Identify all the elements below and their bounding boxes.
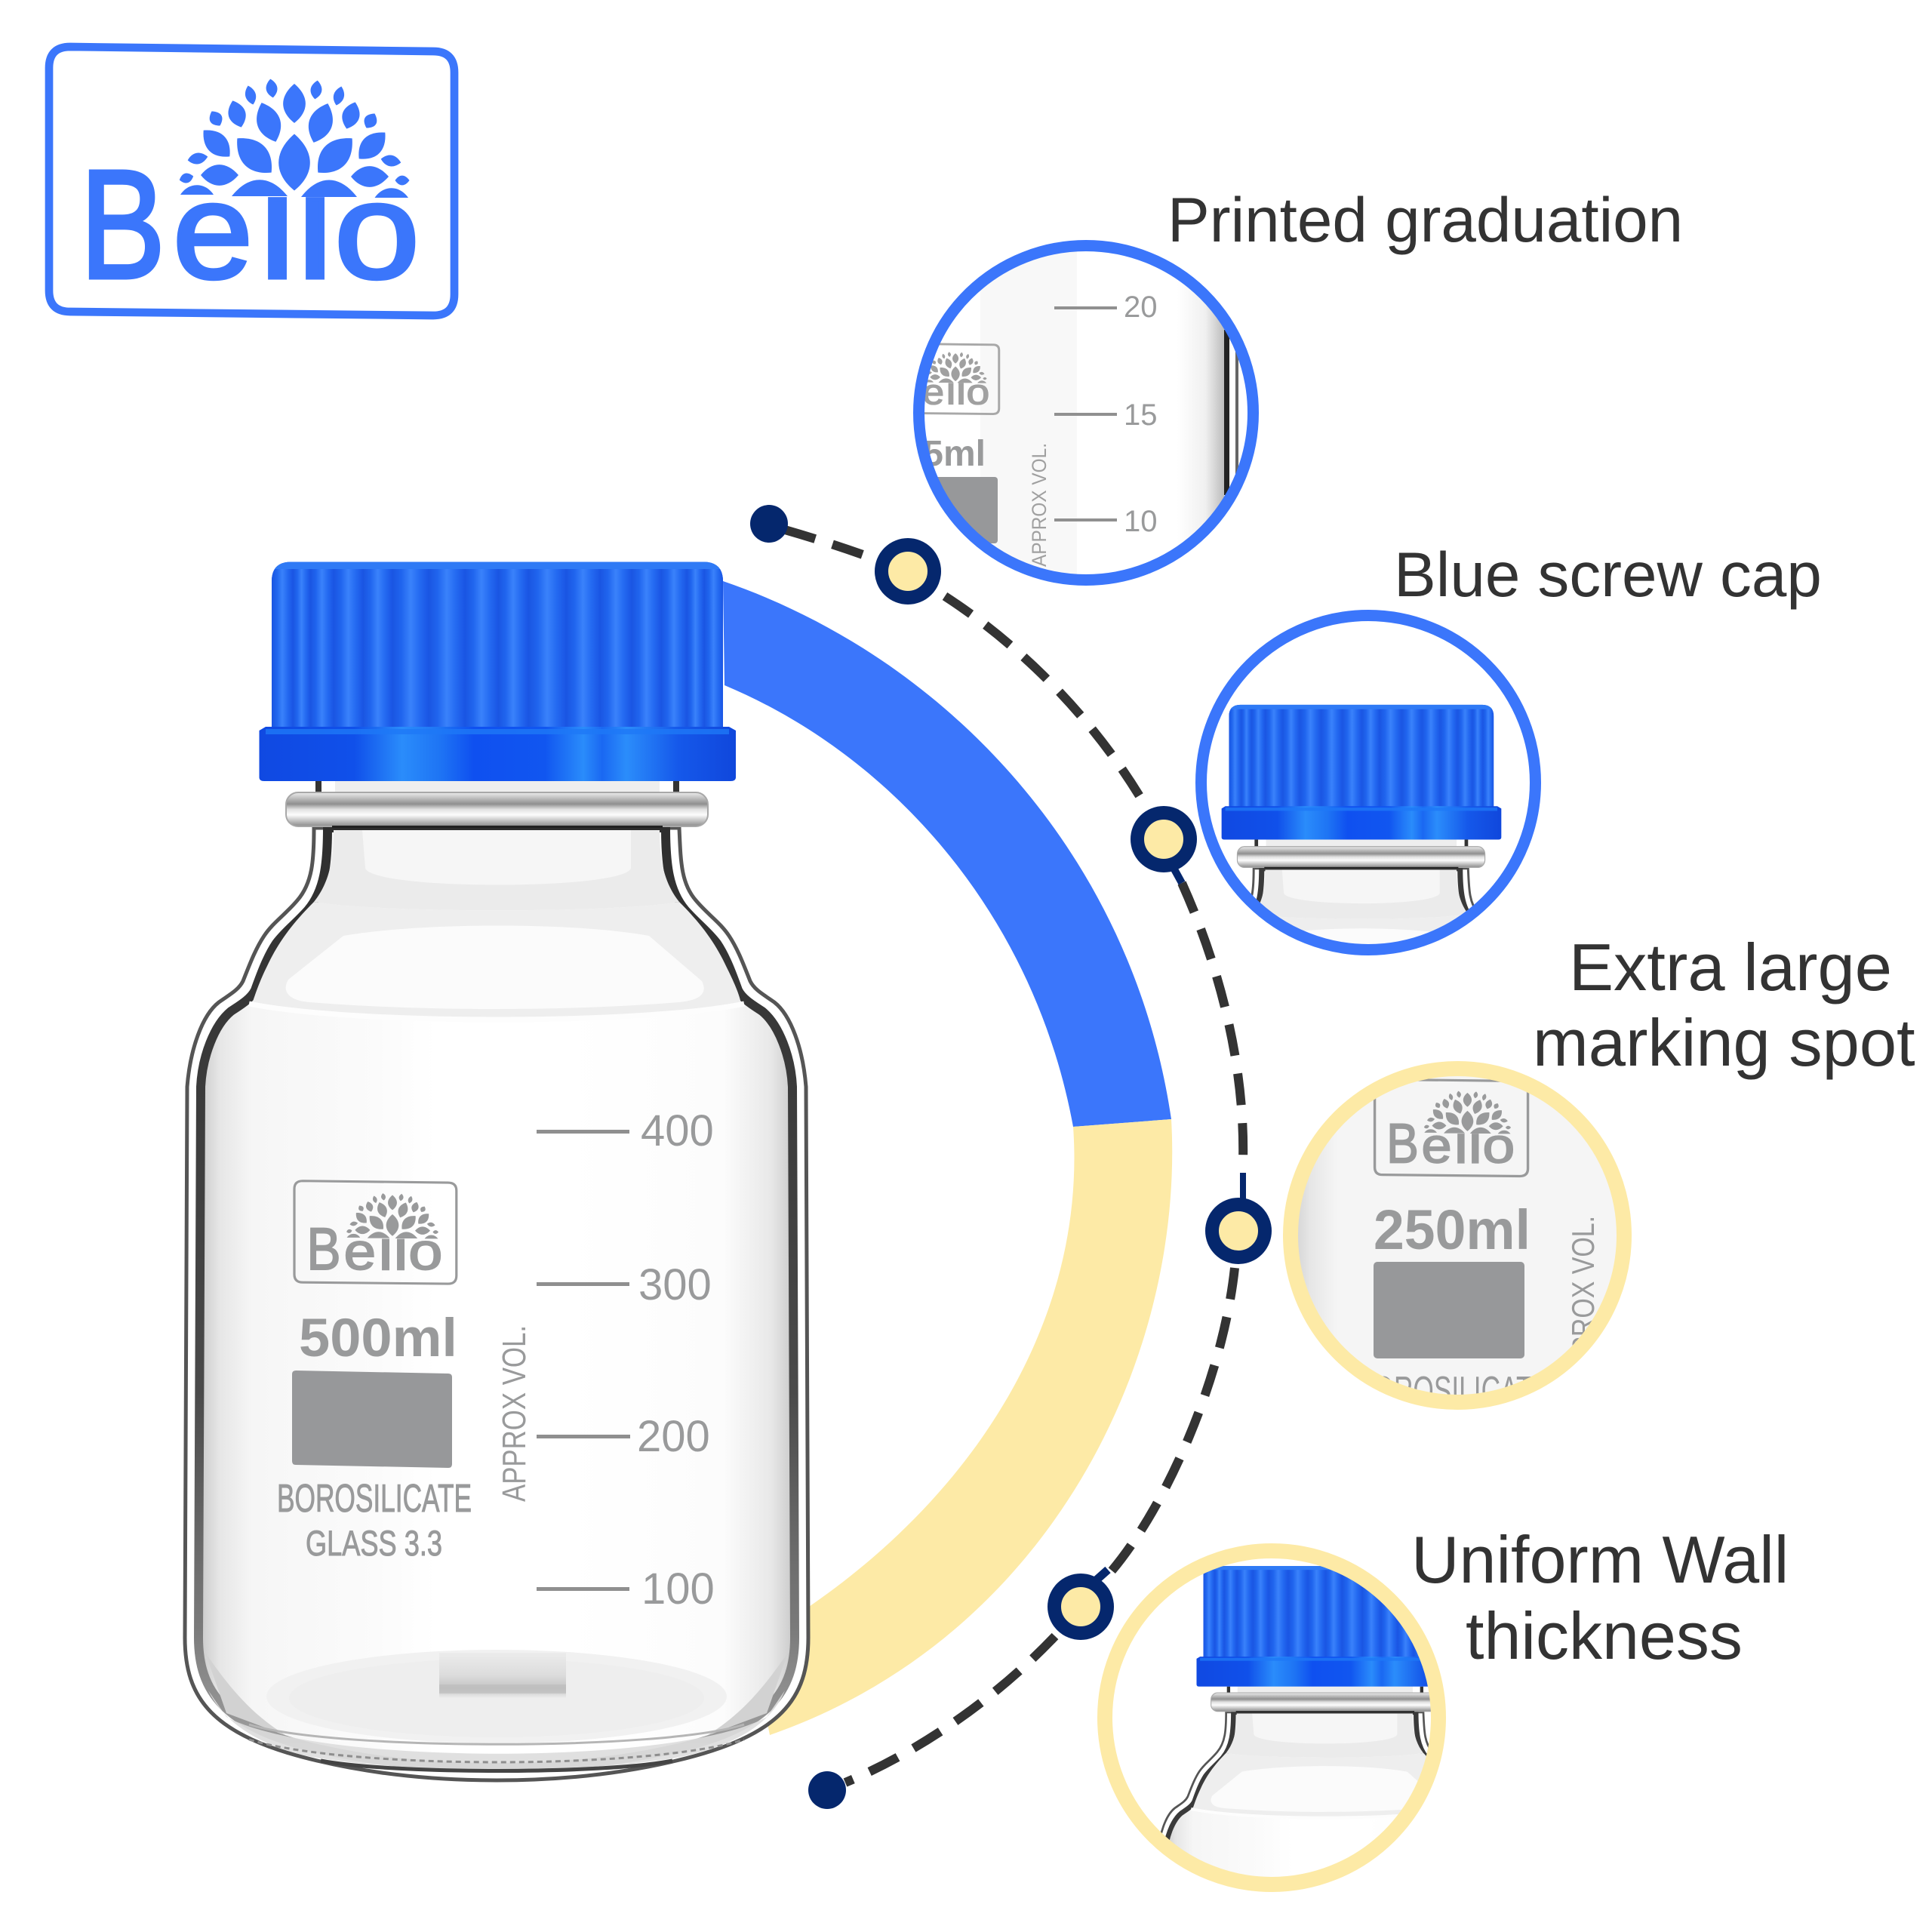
detail circle: extra large marking spot <box>1283 1063 1632 1413</box>
graduation numbers <box>637 1106 715 1614</box>
detail circle: printed graduation: l <box>956 379 966 411</box>
capacity label: 500ml <box>299 1309 457 1368</box>
logo frame <box>49 47 454 315</box>
graduation numbers: 100 <box>641 1564 715 1614</box>
curved band: blue segment <box>723 581 1171 1127</box>
detail circle: uniform wall thickness <box>1097 1543 1446 1892</box>
logo: Bello brand badge <box>49 47 454 315</box>
detail circle: printed graduation: o <box>966 372 989 412</box>
detail circle: printed graduation: 15 <box>1124 398 1158 432</box>
graduation numbers: 300 <box>638 1260 712 1309</box>
heading: extra large marking spot <box>1533 930 1915 1080</box>
graduation numbers: 400 <box>641 1106 714 1155</box>
bottle logo: B <box>306 1217 341 1283</box>
logo wordmark: e <box>173 155 253 307</box>
approximate volume label: APPROX VOL. <box>496 1325 533 1502</box>
logo wordmark: l <box>298 180 332 301</box>
logo wordmark: l <box>260 180 294 301</box>
bottle logo: o <box>408 1222 442 1281</box>
detail circle: printed graduation: l <box>946 379 955 411</box>
heading: extra large marking spot: marking spot <box>1533 1005 1915 1080</box>
detail circle: blue screw cap <box>1195 610 1541 955</box>
connector node 2 <box>1137 813 1190 883</box>
bottle logo: e <box>344 1222 376 1281</box>
detail circle: printed graduation: 25ml <box>903 434 986 474</box>
detail circle: printed graduation: APPROX VOL. <box>1028 443 1051 567</box>
connector end dot <box>808 1771 846 1809</box>
heading: uniform wall thickness: thickness <box>1466 1598 1743 1673</box>
marking spot <box>292 1371 452 1468</box>
detail circle: extra large marking spot: l <box>1469 1128 1481 1171</box>
logo wordmark: B <box>80 138 165 311</box>
curved band: yellow segment <box>755 1119 1172 1735</box>
detail circle: printed graduation <box>889 241 1259 586</box>
detail circle: printed graduation: B <box>897 367 921 413</box>
detail circle: extra large marking spot: 250ml <box>1374 1198 1531 1261</box>
graduation ticks <box>537 1130 630 1591</box>
connector node 3 <box>1212 1173 1265 1257</box>
detail circle: extra large marking spot: B <box>1386 1113 1419 1175</box>
bottle logo: l <box>379 1232 392 1278</box>
bottle glass body <box>185 828 808 1780</box>
heading: printed graduation: Printed graduation <box>1168 184 1683 255</box>
heading: uniform wall thickness <box>1411 1522 1789 1673</box>
bottle logo: l <box>394 1232 408 1278</box>
detail circle: printed graduation: e <box>922 372 944 412</box>
connector node 4 <box>1054 1570 1108 1633</box>
logo wordmark: o <box>334 155 420 307</box>
material label: BOROSILICATE <box>277 1477 472 1521</box>
bottle neck and blue cap <box>260 561 736 828</box>
graduation numbers: 200 <box>637 1412 710 1461</box>
main bottle <box>185 561 808 1780</box>
heading: extra large marking spot: Extra large <box>1569 930 1892 1004</box>
detail circle: extra large marking spot: e <box>1422 1119 1452 1174</box>
heading: uniform wall thickness: Uniform Wall <box>1411 1522 1789 1597</box>
glass grade label: GLASS 3.3 <box>306 1523 442 1563</box>
connector start dot <box>750 505 788 543</box>
icon: lotus tree <box>178 78 409 198</box>
detail circle: extra large marking spot: o <box>1482 1119 1515 1174</box>
detail circle: extra large marking spot: BOROSILICATE <box>1355 1369 1550 1413</box>
dashed connector line <box>785 530 1243 1783</box>
detail circle: printed graduation: 20 <box>1124 291 1158 324</box>
bottle logo <box>294 1181 457 1284</box>
connector node 1 <box>881 545 934 598</box>
heading: blue screw cap: Blue screw cap <box>1394 539 1822 610</box>
detail circle: extra large marking spot: l <box>1454 1128 1467 1171</box>
detail circle: extra large marking spot: APPROX VOL. <box>1565 1216 1601 1388</box>
detail circle: printed graduation: 10 <box>1124 505 1158 538</box>
